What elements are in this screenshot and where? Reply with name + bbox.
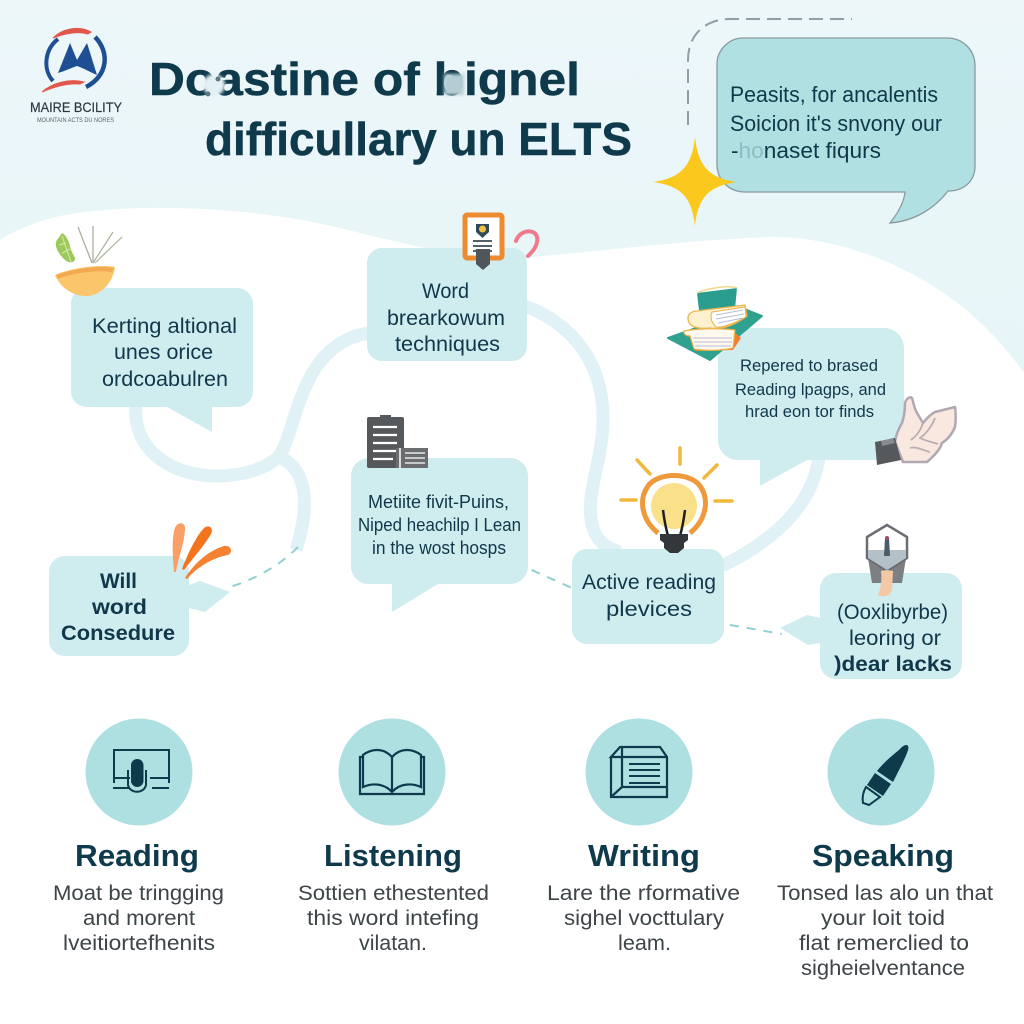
icon: pen bbox=[828, 718, 934, 826]
panel: Will word Consedure: word bbox=[91, 596, 147, 619]
feature: Writing: Lare the rformative bbox=[547, 882, 740, 905]
callout: top speech bubble with star: Soicion it's snvony our bbox=[730, 111, 942, 136]
icon: monitor with microphone bbox=[86, 718, 192, 826]
panel: Will word Consedure: Will bbox=[100, 570, 137, 593]
feature: Speaking: your loit toid bbox=[821, 907, 945, 930]
panel: Kerting altional: ordcoabulren bbox=[102, 368, 228, 391]
header background wave bbox=[0, 0, 1024, 373]
panel: Repered to brased: hrad eon tor finds bbox=[745, 403, 874, 421]
feature: Writing bbox=[547, 718, 740, 955]
feature: Writing: leam. bbox=[618, 932, 671, 955]
icon: box with text lines bbox=[586, 718, 692, 826]
title bbox=[149, 53, 632, 165]
feature: Reading: and morent bbox=[83, 907, 195, 930]
feature: Speaking: flat remerclied to bbox=[799, 932, 969, 955]
panel: Metite fivit-Puins: Niped heachilp I Lean bbox=[358, 515, 521, 535]
feature: Listening: Sottien ethestented bbox=[298, 882, 489, 905]
panel: Repered to brased: Repered to brased bbox=[740, 357, 878, 375]
feature: Reading: lveitiortefhenits bbox=[63, 932, 215, 955]
feature: Speaking: sigheielventance bbox=[801, 957, 965, 980]
callout: top speech bubble with star: Peasits, for ancalentis bbox=[730, 82, 938, 107]
panel: Oxlibyrbe bbox=[780, 573, 962, 679]
panel: Metite fivit-Puins: in the wost hosps bbox=[372, 538, 506, 558]
icon: certificate with pin bbox=[465, 215, 502, 270]
feature: Writing: Writing bbox=[588, 838, 700, 873]
panel: Kerting altional: unes orice bbox=[114, 341, 213, 364]
connector curves bbox=[136, 306, 819, 566]
panel: Will word Consedure bbox=[49, 556, 230, 656]
panel: Active reading bbox=[572, 549, 724, 644]
icon: light bulb bbox=[621, 448, 732, 553]
title: difficullary un ELTS bbox=[205, 113, 632, 165]
feature: Reading: Reading bbox=[75, 838, 199, 873]
panel: Repered to brased: Reading lpagps, and bbox=[735, 381, 886, 399]
panel: Kerting altional bbox=[71, 288, 253, 432]
feature: Listening: this word intefing bbox=[307, 907, 479, 930]
icon: open book bbox=[338, 718, 446, 826]
panel: Word breakdown techniques: techniques bbox=[395, 333, 500, 356]
feature: Listening: Listening bbox=[324, 838, 462, 873]
icon: orange sparks bbox=[173, 523, 231, 579]
panel: Oxlibyrbe: leoring or bbox=[849, 627, 941, 650]
panel: Oxlibyrbe: (Ooxlibyrbe) bbox=[837, 601, 948, 624]
panel: Metite fivit-Puins: Metiite fivit-Puins, bbox=[368, 492, 509, 512]
logo bbox=[30, 28, 123, 124]
feature: Writing: sighel vocttulary bbox=[564, 907, 725, 930]
feature: Listening: vilatan. bbox=[359, 932, 427, 955]
logo: MAIRE BCILITY bbox=[30, 99, 123, 115]
panel: Will word Consedure: Consedure bbox=[61, 622, 175, 645]
panel: Active reading: plevices bbox=[606, 597, 692, 621]
icon: pink hook bbox=[516, 231, 537, 256]
icon: clipboard documents bbox=[367, 415, 428, 468]
dashed connectors bbox=[230, 547, 782, 634]
feature: Speaking: Tonsed las alo un that bbox=[777, 882, 993, 905]
panel: Oxlibyrbe: )dear lacks bbox=[834, 653, 952, 676]
icon: hand bbox=[875, 397, 956, 465]
title: Doastine of bignel bbox=[149, 53, 580, 105]
panel: Word breakdown techniques: Word bbox=[422, 280, 469, 303]
panel: Repered to brased bbox=[718, 328, 904, 486]
feature: Reading: Moat be tringging bbox=[53, 882, 224, 905]
icon: plant in bowl bbox=[55, 226, 122, 296]
feature: Reading bbox=[53, 718, 224, 955]
logo: MOUNTAIN ACTS DU NORES bbox=[37, 117, 115, 124]
callout: top speech bubble with star bbox=[653, 19, 975, 226]
icon: shield with finger bbox=[867, 525, 907, 596]
panel: Active reading: Active reading bbox=[582, 570, 716, 594]
feature: Listening bbox=[298, 718, 489, 955]
feature: Speaking bbox=[777, 718, 993, 980]
panel: Kerting altional: Kerting altional bbox=[92, 315, 237, 338]
panel: Metite fivit-Puins bbox=[351, 458, 528, 612]
feature: Speaking: Speaking bbox=[812, 838, 954, 873]
icon: stack of books bbox=[668, 287, 762, 360]
panel: Word breakdown techniques: brearkowum bbox=[387, 307, 505, 330]
panel: Word breakdown techniques bbox=[367, 248, 527, 361]
callout: top speech bubble with star: -honaset fiqurs bbox=[731, 138, 881, 163]
